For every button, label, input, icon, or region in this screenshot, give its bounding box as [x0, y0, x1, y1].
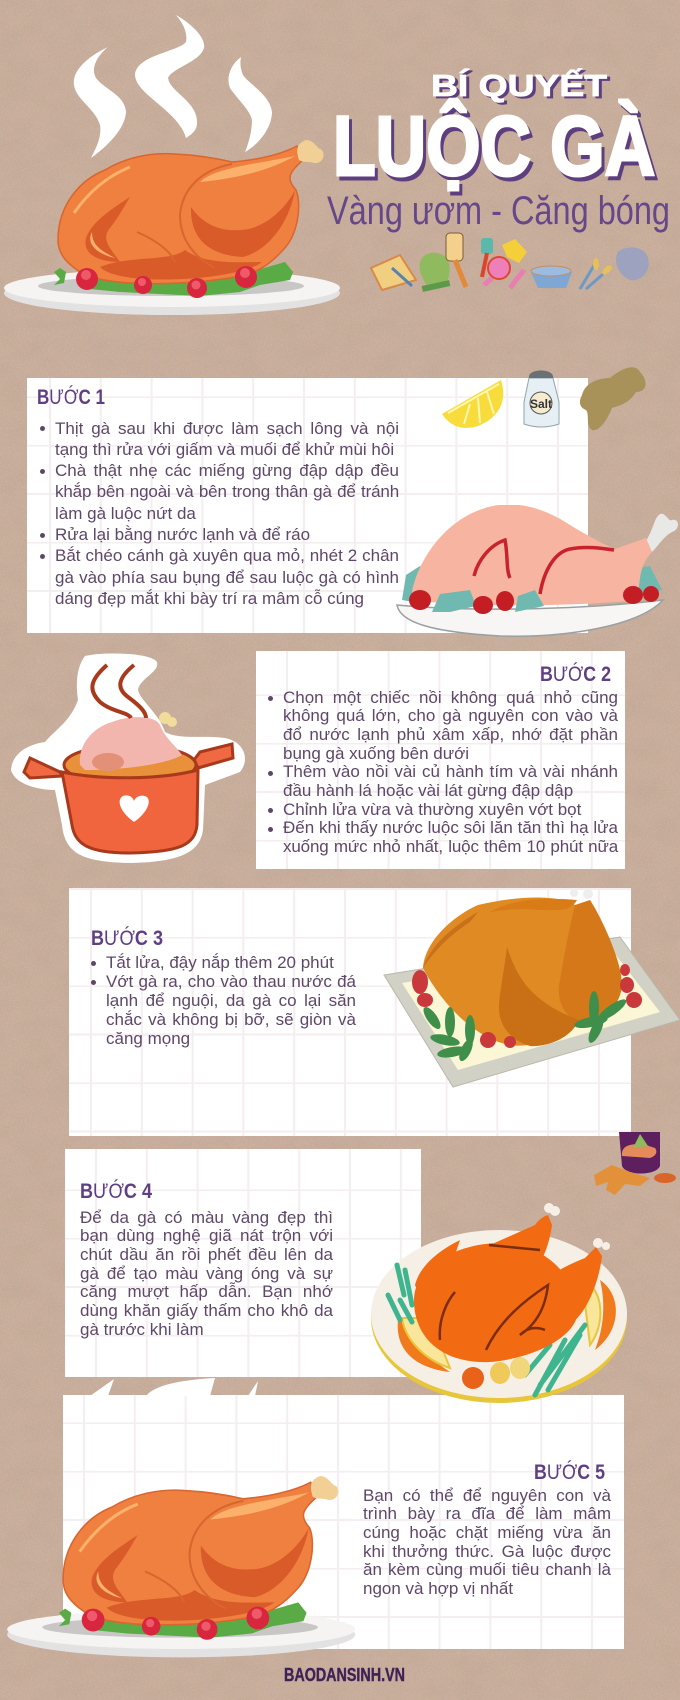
icons: kitchen utensils row — [370, 232, 649, 292]
title: Bí quyết luộc gà — [327, 68, 670, 233]
text block: step 4 instructions: Để da gà có màu vàng đẹp thì — [80, 1208, 333, 1226]
text block: step 3 instructions: chắc và không bị bỡ, sẽ giòn và — [106, 1010, 356, 1029]
text block: step 4 instructions: dùng khăn giấy thấm cho khô da — [80, 1301, 333, 1320]
text block: step 1 instructions: Thịt gà sau khi được làm sạch lông và nội — [55, 418, 399, 438]
text block: step 5 instructions — [363, 1486, 611, 1598]
heading: Bước 3: BƯỚC 3 — [91, 927, 163, 950]
illustration: roast chicken on plate — [4, 140, 340, 315]
text block: step 2 instructions: đổ nước lạnh phủ xâm xấp, nhớ đặt phần — [283, 725, 618, 744]
text block: step 4 instructions — [80, 1208, 333, 1339]
text block: step 2 instructions: bụng gà xuống bên dưới — [283, 744, 469, 763]
text block: step 1 instructions: Chà thật nhẹ các miếng gừng đập dập đều — [55, 461, 399, 480]
text block: step 1 instructions: khắp bên ngoài và bên trong thân gà để tránh — [55, 482, 399, 501]
text block: step 1 instructions — [40, 418, 399, 608]
illustration: pot with chicken — [11, 654, 245, 863]
panel: step 2 — [256, 651, 625, 869]
panel: step 5 — [63, 1395, 624, 1649]
text block: step 3 instructions: Vớt gà ra, cho vào thau nước đá — [106, 972, 356, 991]
panel: step 1 — [27, 378, 588, 633]
text block: step 4 instructions: căng mượt hấp dẫn. Bạn nhớ — [80, 1282, 333, 1301]
heading: Bước 5: BƯỚC 5 — [534, 1461, 605, 1484]
icon: ginger root — [580, 367, 646, 430]
heading: Bước 4: BƯỚC 4 — [80, 1180, 152, 1203]
text block: step 1 instructions: tạng thì rửa với giấm và muối để khử mùi hôi — [55, 440, 394, 459]
text block: step 3 instructions — [91, 953, 356, 1048]
heading: Bước 1: BƯỚC 1 — [37, 386, 105, 409]
heading: Bước 2: BƯỚC 2 — [540, 663, 611, 686]
icon: salt shaker — [524, 370, 560, 428]
text block: step 2 instructions: đầu hành lá hoặc vài lát gừng đập dập — [283, 781, 573, 800]
text block: step 3 instructions: lạnh để nguội, da gà co lại săn — [106, 991, 356, 1010]
text block: step 2 instructions: Thêm vào nồi vài củ hành tím và vài nhánh — [283, 762, 618, 781]
icon: lemon wedge — [442, 380, 504, 428]
text block: step 4 instructions: gà để tạo màu vàng óng và sự — [80, 1264, 333, 1283]
text block: step 2 instructions: Chọn một chiếc nồi không quá nhỏ cũng — [283, 688, 618, 706]
icon: salt shaker: Salt — [530, 397, 552, 411]
text block: step 3 instructions: Tắt lửa, đậy nắp thêm 20 phút — [106, 953, 334, 972]
text block: step 2 instructions: xuống mức nhỏ nhất, luộc thêm 10 phút nữa — [283, 837, 618, 856]
text block: step 5 instructions: khi thưởng thức. Gà luộc được — [363, 1542, 611, 1561]
text block: step 1 instructions: Bắt chéo cánh gà xuyên qua mỏ, nhét 2 chân — [55, 546, 399, 565]
text block: step 5 instructions: ngon và hợp vị nhất — [363, 1579, 513, 1598]
text block: step 4 instructions: bạn dùng nghệ giã nát trộn với — [80, 1226, 333, 1245]
panel: step 3 — [69, 888, 631, 1136]
icon: steam tips above step 5 — [92, 1378, 258, 1396]
illustration: roast chicken on tray — [383, 890, 680, 1088]
text block: step 5 instructions: Bạn có thể để nguyên con và — [363, 1486, 611, 1504]
text block: step 1 instructions: dáng đẹp mắt khi bày trí ra mâm cỗ cúng — [55, 589, 364, 608]
text block: step 2 instructions: Đến khi thấy nước luộc sôi lăn tăn thì hạ lửa — [283, 818, 618, 837]
text block: step 5 instructions: ăn kèm cùng muối tiêu chanh là — [363, 1560, 611, 1579]
text block: step 1 instructions: gà vào phía sau bụng để sau luộc gà có hình — [55, 568, 399, 587]
panel: step 4 — [65, 1149, 421, 1377]
illustration: orange chicken on round plate — [371, 1203, 627, 1403]
text block: step 4 instructions: gà trước khi làm — [80, 1320, 204, 1339]
text block: step 1 instructions: Rửa lại bằng nước lạnh và để ráo — [55, 525, 310, 544]
text block: step 3 instructions: căng mọng — [106, 1029, 190, 1048]
icon: steam above title chicken — [74, 15, 272, 158]
title line: BÍ QUYẾT: BÍ QUYẾT — [431, 68, 607, 103]
icon: turmeric bowl and roots — [594, 1132, 676, 1195]
text block: step 2 instructions: không quá lớn, cho gà nguyên con vào và — [283, 706, 618, 725]
text block: step 2 instructions: Chỉnh lửa vừa và thường xuyên vớt bọt — [283, 800, 581, 819]
illustration: raw chicken on plate — [396, 505, 678, 637]
illustration: roast chicken in step 5 — [7, 1476, 356, 1658]
text block: step 4 instructions: chút dầu ăn rồi phết đều lên da — [80, 1245, 333, 1264]
text block: step 1 instructions: làm gà luộc nứt da — [55, 504, 196, 523]
text block: step 5 instructions: cúng hoặc chặt miếng vừa ăn — [363, 1523, 611, 1542]
text block: step 5 instructions: trình bày ra đĩa để làm mâm — [363, 1504, 611, 1523]
text block: step 2 instructions — [268, 688, 618, 856]
